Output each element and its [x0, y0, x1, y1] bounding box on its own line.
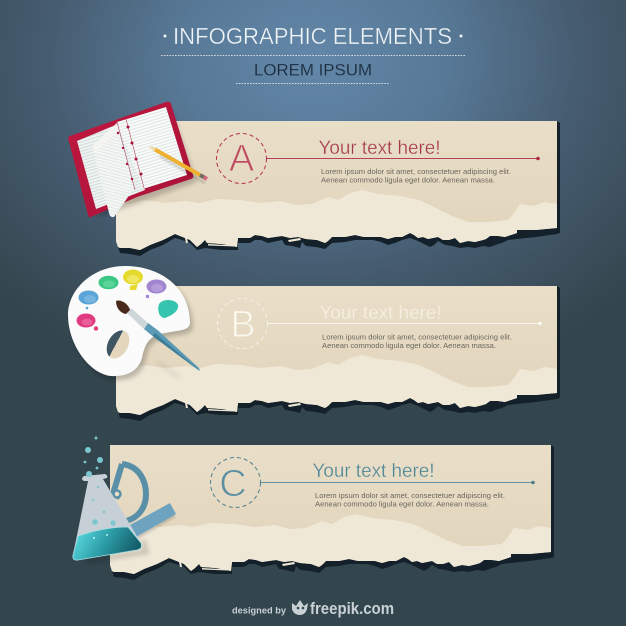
connector line C — [261, 481, 535, 484]
subtitle: LOREM IPSUM — [254, 62, 372, 80]
pencil — [148, 146, 207, 183]
paintbrush — [116, 300, 200, 378]
body text B: Lorem ipsum dolor sit amet, consectetuer adipiscing elit. — [322, 332, 512, 342]
panel: B — [68, 266, 560, 421]
body text C: Lorem ipsum dolor sit amet, consectetuer adipiscing elit. — [315, 491, 505, 500]
body text A — [321, 167, 511, 184]
body text A: Lorem ipsum dolor sit amet, consectetuer adipiscing elit. — [321, 167, 511, 176]
connector line B — [268, 322, 542, 325]
icon: notebook and pencil — [68, 102, 207, 218]
paint: blue — [78, 290, 98, 309]
heading A: Your text here! — [318, 137, 440, 159]
footer credit: designed by — [232, 606, 287, 616]
torn paper C — [110, 445, 554, 580]
icon: freepik logo — [292, 600, 308, 615]
paint: green — [98, 276, 118, 289]
letter badge A: A — [229, 138, 255, 180]
body text A: Aenean commodo ligula eget dolor. Aenean massa. — [321, 176, 495, 184]
body text C — [315, 491, 505, 508]
torn paper A — [116, 121, 560, 256]
letter badge A — [216, 134, 266, 184]
footer credit — [232, 600, 394, 618]
connector line A — [267, 157, 540, 160]
body text B — [322, 332, 512, 350]
icon: protractor — [113, 464, 176, 540]
torn paper B — [116, 286, 560, 421]
paint: teal — [158, 300, 178, 318]
paint: pink — [76, 314, 98, 331]
heading C: Your text here! — [312, 460, 434, 482]
icon: flask — [73, 436, 146, 561]
letter badge B: B — [230, 304, 256, 346]
body text B: Aenean commodo ligula eget dolor. Aenean massa. — [322, 341, 496, 350]
panel: C — [73, 436, 554, 580]
letter badge C — [210, 458, 260, 508]
footer credit: freepik.com — [310, 600, 394, 618]
icon: paint palette and brush — [68, 266, 200, 380]
paint: purple — [146, 280, 166, 298]
title: INFOGRAPHIC ELEMENTS — [173, 23, 452, 49]
letter badge C: C — [219, 463, 247, 505]
panel: A — [68, 102, 560, 256]
body text C: Aenean commodo ligula eget dolor. Aenean massa. — [315, 500, 489, 508]
letter badge B — [218, 298, 268, 348]
heading B: Your text here! — [320, 302, 442, 324]
paint: yellow — [123, 270, 143, 290]
